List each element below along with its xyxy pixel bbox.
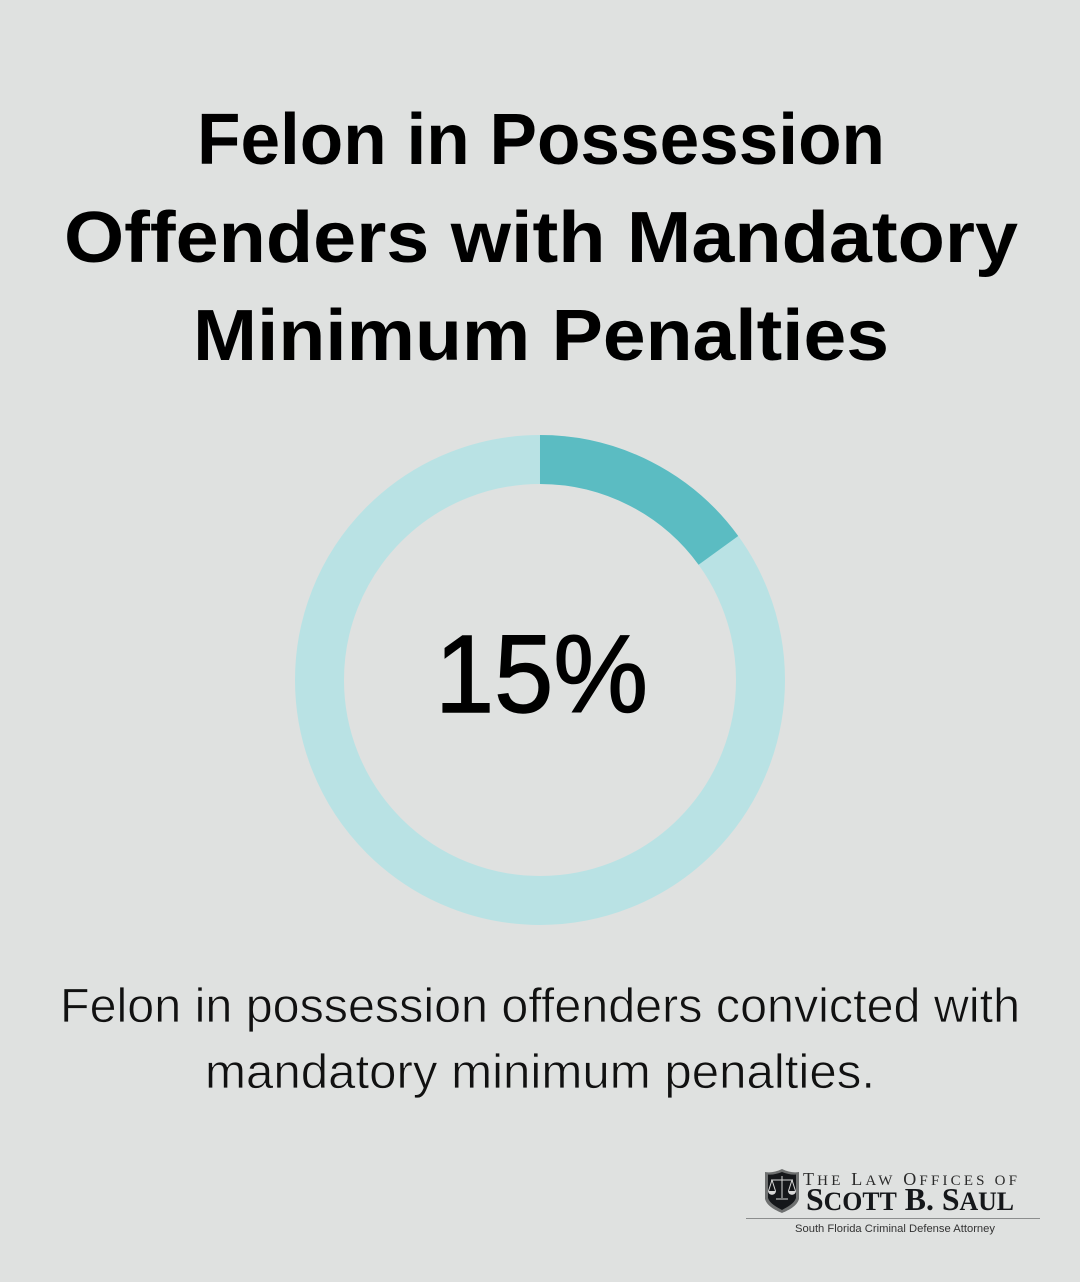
logo divider	[746, 1218, 1040, 1219]
description: mandatory minimum penalties.	[205, 1046, 875, 1099]
title: Minimum Penalties	[193, 296, 889, 376]
icon: shield with scales	[765, 1169, 799, 1213]
logo tagline: South Florida Criminal Defense Attorney	[795, 1223, 996, 1235]
title: Offenders with Mandatory	[64, 198, 1018, 278]
title: Felon in Possession	[197, 100, 885, 180]
logo	[746, 1169, 1040, 1235]
description: Felon in possession offenders convicted with	[60, 980, 1020, 1033]
percentage value: 15%	[435, 613, 648, 736]
title	[64, 100, 1018, 376]
logo text: scott b. saul: SCOTT B. SAUL	[806, 1181, 1014, 1217]
description	[60, 980, 1020, 1099]
donut chart	[320, 460, 760, 900]
logo text: the law offices of: THE LAW OFFICES OF	[803, 1169, 1017, 1189]
